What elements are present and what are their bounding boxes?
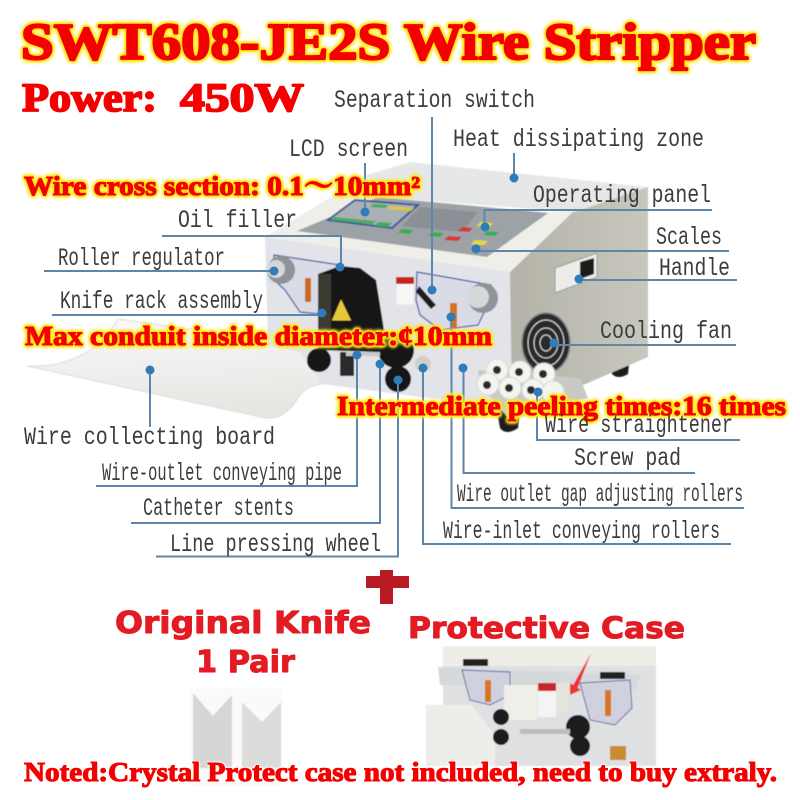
orange sliders xyxy=(485,680,611,716)
side face xyxy=(510,187,648,408)
heading: original knife: Original Knife xyxy=(115,606,371,641)
footnote: Noted:Crystal Protect case not included, need to buy extraly. xyxy=(24,757,777,787)
conveying pipe xyxy=(346,352,380,356)
label: scales: Scales xyxy=(656,223,722,252)
cream hood xyxy=(265,175,575,272)
left knob xyxy=(267,256,295,284)
left dial panel xyxy=(462,670,510,705)
label: handle: Handle xyxy=(659,254,730,283)
rear top with vents xyxy=(367,162,648,212)
panel buttons xyxy=(331,204,499,245)
right blade xyxy=(242,702,281,768)
label: knife rack assembly: Knife rack assembly xyxy=(60,287,263,316)
wire collecting board xyxy=(27,319,322,418)
acrylic cover xyxy=(438,667,640,690)
label: wire straightener: Wire straightener xyxy=(545,411,733,440)
machine illustration xyxy=(265,162,648,432)
separation switch xyxy=(416,286,436,309)
left orange slider xyxy=(305,278,311,302)
hazard triangle xyxy=(331,298,352,321)
part labels xyxy=(24,86,743,559)
max conduit spec: Max conduit inside diameter:¢10mm xyxy=(25,321,493,351)
warning label xyxy=(396,277,414,305)
pipe xyxy=(520,729,570,734)
right orange slider xyxy=(450,303,457,329)
label: wire-outlet conveying pipe: Wire-outlet conveying pipe xyxy=(102,459,342,488)
label: operating panel: Operating panel xyxy=(533,181,711,210)
orange fitting xyxy=(610,746,626,760)
power spec: 450W xyxy=(180,75,304,120)
black rollers xyxy=(493,709,590,756)
label: oil filler: Oil filler xyxy=(178,206,297,235)
callout dots xyxy=(146,174,584,396)
label: roller regulator: Roller regulator xyxy=(58,244,225,273)
label: LCD screen: LCD screen xyxy=(289,135,408,164)
red arrow xyxy=(571,653,591,692)
left dial panel xyxy=(274,255,345,315)
top cream band xyxy=(443,646,656,666)
handle xyxy=(555,253,597,293)
fan xyxy=(522,313,570,373)
white cover block xyxy=(504,685,537,720)
label: line pressing wheel: Line pressing wheel xyxy=(170,530,381,559)
right knob xyxy=(468,283,498,313)
label: cooling fan: Cooling fan xyxy=(600,317,732,346)
heading: 1 pair: 1 Pair xyxy=(196,645,295,680)
knife blades photo xyxy=(190,688,282,786)
power spec xyxy=(22,75,304,120)
rack strap xyxy=(318,274,331,348)
power spec: Power: xyxy=(22,75,157,120)
right dial panel xyxy=(416,272,491,330)
rack cover xyxy=(537,682,570,718)
wire cross section spec: Wire cross section: 0.1～10mm² xyxy=(24,171,420,201)
machine feet xyxy=(495,355,630,432)
warning label xyxy=(538,683,556,717)
callout lines xyxy=(44,117,744,556)
title: SWT608-JE2S Wire Stripper xyxy=(21,14,756,71)
label: screw pad: Screw pad xyxy=(574,444,681,473)
label: wire collecting board: Wire collecting board xyxy=(24,423,275,452)
black wheels xyxy=(307,332,414,392)
label: separation switch: Separation switch xyxy=(334,86,535,115)
front face xyxy=(265,237,512,406)
left clip xyxy=(463,659,488,666)
label: catheter stents: Catheter stents xyxy=(143,494,294,523)
LCD screen xyxy=(328,200,418,228)
peeling times spec: Intermediate peeling times:16 times xyxy=(337,391,786,421)
keypad xyxy=(402,207,478,232)
straightener rollers xyxy=(477,359,564,403)
plus sign xyxy=(366,570,409,604)
label: heat dissipating zone: Heat dissipating zone xyxy=(453,125,704,154)
protective case photo xyxy=(426,646,656,766)
grey control panel xyxy=(297,197,548,257)
right dial panel xyxy=(580,680,632,725)
collecting board xyxy=(426,705,495,766)
right clip xyxy=(600,672,625,679)
black knife rack xyxy=(318,266,384,352)
machine front xyxy=(443,646,656,766)
brass fitting xyxy=(415,356,431,372)
heading: protective case: Protective Case xyxy=(408,611,685,645)
straightener frame xyxy=(478,370,588,420)
left blade xyxy=(193,693,232,768)
roller centres xyxy=(483,366,547,394)
